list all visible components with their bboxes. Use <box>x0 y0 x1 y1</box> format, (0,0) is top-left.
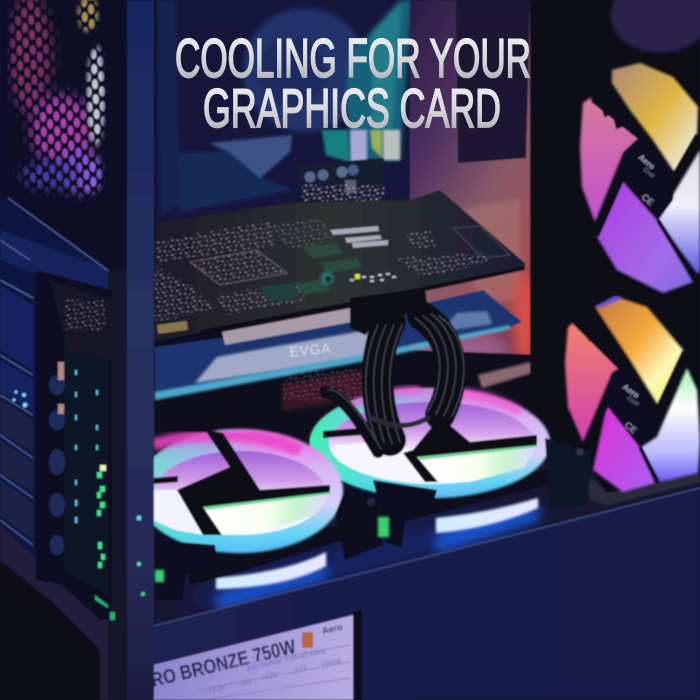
outer ring <box>310 388 550 498</box>
blade area <box>329 402 535 484</box>
cross hub <box>403 417 537 482</box>
fan: top right <box>580 63 700 293</box>
power cable bundle <box>325 288 464 452</box>
fan blade: bright white <box>640 368 700 482</box>
fan blade: coral pink <box>565 323 620 442</box>
panel: case pillar <box>127 0 156 700</box>
fan hub with logo: CE <box>640 192 656 208</box>
capacitors block <box>298 158 385 207</box>
shelf front face <box>153 488 700 700</box>
power supply label: RO BRONZE 750W <box>149 636 298 692</box>
blade area <box>154 451 326 535</box>
fan blade: pink <box>580 98 640 222</box>
fan: bottom right <box>565 296 700 492</box>
panel: right dark frame <box>530 0 700 510</box>
pale contact bars <box>330 226 379 235</box>
fan blade: magenta <box>593 405 655 492</box>
component clusters <box>155 218 490 322</box>
fan blade: purple <box>597 180 693 293</box>
memory chips <box>320 258 362 273</box>
title <box>175 27 531 139</box>
fan hub with logo: Cool <box>626 396 639 408</box>
lower light strip <box>216 552 326 589</box>
title: GRAPHICS CARD <box>203 77 501 139</box>
bracket <box>36 270 112 620</box>
mesh light blobs <box>8 0 105 194</box>
panel: dark lower motherboard <box>155 350 548 470</box>
fan hub with logo <box>592 96 697 280</box>
lower light strip <box>436 498 538 533</box>
fan hub with logo: Aero <box>637 153 657 171</box>
fan hub with logo: Aero <box>621 382 641 400</box>
cable connector <box>350 288 428 335</box>
dark gap beside pillar <box>108 270 127 700</box>
ring reflection <box>436 505 540 552</box>
panel: motherboard backdrop <box>155 0 415 240</box>
power supply label: Aero <box>321 621 344 636</box>
power supply label: +12V <box>261 671 279 682</box>
fan: lower right ring <box>310 388 552 552</box>
power supply label: +5Vsb <box>321 658 342 669</box>
ring reflection <box>216 565 328 610</box>
fan: lower left ring <box>137 428 345 610</box>
blue accent on blade top <box>595 296 623 308</box>
fan hub with logo: CE <box>623 420 639 436</box>
graphics card shroud with EVGA logo <box>155 290 522 400</box>
fan mounting corners <box>153 438 592 600</box>
shelf metallic strip <box>585 473 700 505</box>
board LEDs <box>321 272 333 284</box>
glow beneath fans <box>180 498 520 622</box>
panel: back wall <box>410 0 545 370</box>
power supply label: +3.3V <box>207 684 227 695</box>
strip under the circuit board <box>222 307 352 345</box>
power supply label: -12V <box>292 665 308 675</box>
dark heatsink rail <box>158 0 180 215</box>
cross hub <box>177 428 330 535</box>
power supply label <box>149 610 362 700</box>
fan blade: orange yellow <box>595 297 683 405</box>
fan hub with logo <box>575 320 684 483</box>
graphics card circuit board <box>155 190 525 341</box>
outer ring <box>137 429 343 553</box>
power supply label: 200-240Vac 5.5A 47-63Hz <box>246 648 327 673</box>
purple lower panel <box>0 525 127 700</box>
panel: perforated mesh <box>0 0 127 300</box>
lower frame <box>185 525 345 585</box>
lower frame <box>378 470 552 525</box>
fan blade: yellow <box>612 63 698 173</box>
panel: expansion slot covers <box>0 195 127 700</box>
fan hub with logo: Cool <box>642 167 655 179</box>
shelf top surface <box>155 462 700 626</box>
black vent mesh <box>0 560 100 700</box>
graphics card shroud with EVGA logo: EVGA <box>289 340 332 360</box>
power supply label: +5V <box>239 678 253 688</box>
slate heatsink <box>210 135 292 178</box>
fan blade: white <box>658 150 700 273</box>
